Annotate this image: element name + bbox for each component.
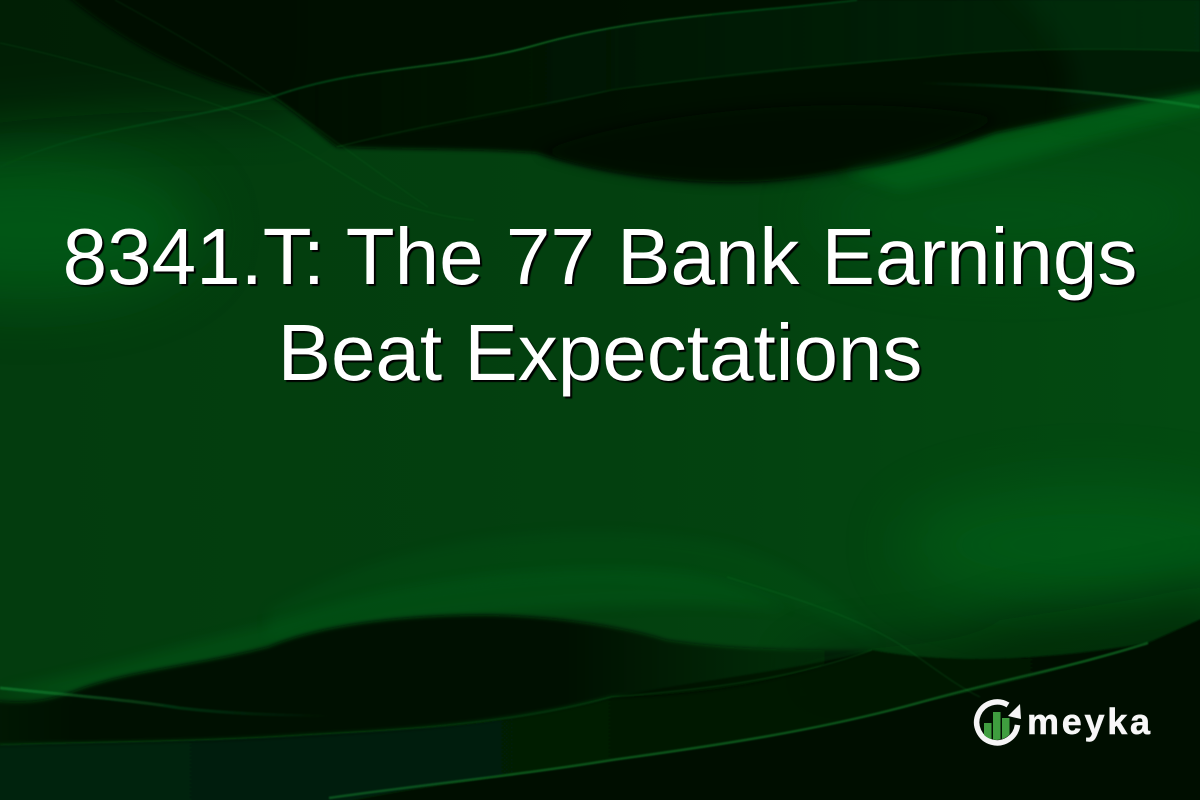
dark lens [540,105,1000,182]
icon: ring with bars and arrow [977,702,1021,743]
logo wordmark: meyka [1027,701,1151,742]
left and right glows [0,160,200,300]
lower lines [329,643,1148,798]
lower sweeps [268,532,880,650]
dark hill [0,615,872,745]
top-left corner shade [0,0,300,130]
upper wave lines [0,0,857,167]
upper right lighter wash [1000,0,1200,118]
top dark mass [60,0,1200,182]
title: 8341.T: The 77 Bank Earnings Beat Expectations [63,212,1137,397]
bottom right dark corner [329,615,1200,800]
bottom dark band [0,643,1148,800]
logo: meyka [974,699,1151,746]
bottom-right fade [800,580,1200,700]
band between upper curves [272,0,1200,147]
